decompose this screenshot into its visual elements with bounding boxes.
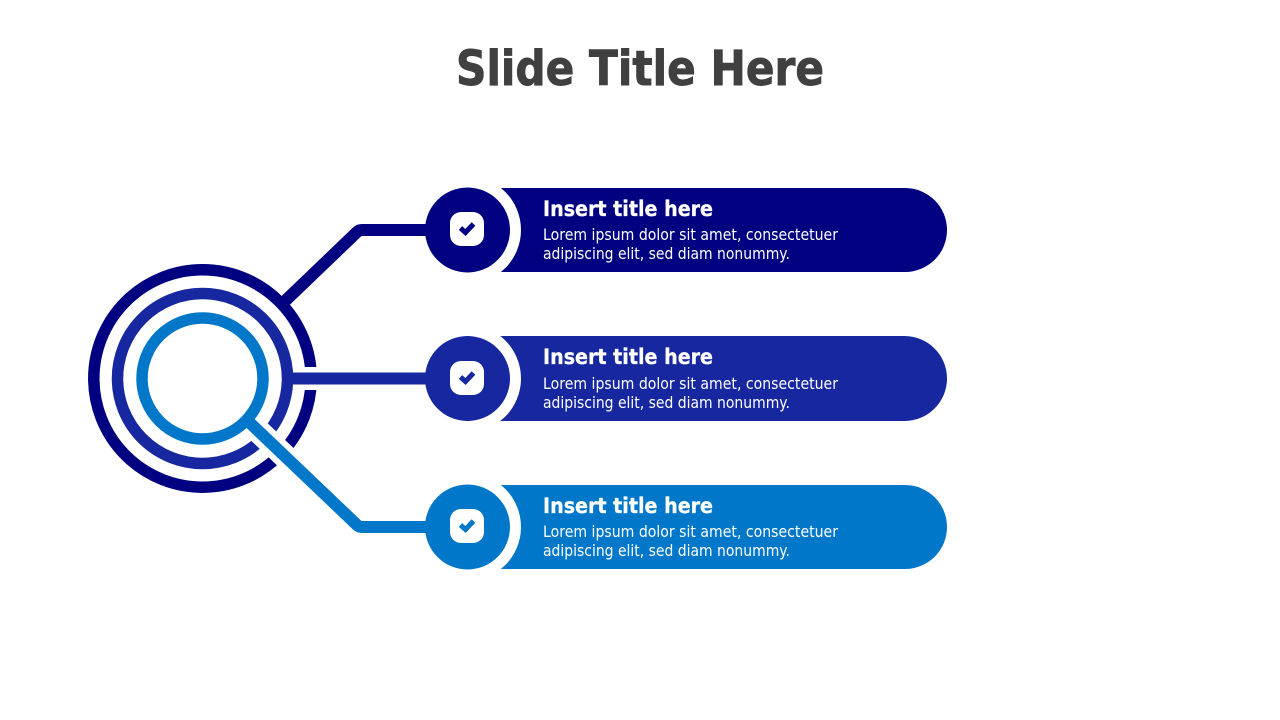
white halo	[413, 176, 521, 284]
gap for bottom connector	[250, 423, 295, 466]
item text	[543, 522, 838, 560]
title: Slide Title Here	[456, 41, 824, 97]
item text	[543, 225, 838, 263]
gap in outer ring for middle connector	[293, 367, 323, 390]
panel: item 1	[413, 176, 947, 284]
item text: adipiscing elit, sed diam nonummy.	[543, 393, 790, 412]
item text: Lorem ipsum dolor sit amet, consectetuer	[543, 225, 838, 244]
item text: Lorem ipsum dolor sit amet, consectetuer	[543, 522, 838, 541]
connector: bottom	[250, 422, 430, 527]
white halo	[413, 473, 521, 581]
icon: check badge	[425, 336, 510, 421]
item text: adipiscing elit, sed diam nonummy.	[543, 244, 790, 263]
outer ring	[94, 270, 311, 487]
panel: item 2	[413, 324, 947, 432]
item heading: Insert title here	[543, 345, 713, 369]
panel: item 3	[413, 473, 947, 581]
pill background	[480, 336, 947, 421]
item text: Lorem ipsum dolor sit amet, consectetuer	[543, 374, 838, 393]
inner ring	[142, 318, 263, 439]
middle ring	[118, 294, 288, 464]
connector: middle	[291, 372, 430, 384]
item heading: Insert title here	[543, 197, 713, 221]
icon: check badge	[425, 188, 510, 272]
item text	[543, 374, 838, 412]
connector: top	[283, 230, 430, 303]
icon: check badge	[425, 484, 510, 570]
diagram: concentric rings with connectors	[94, 230, 430, 527]
pill background	[480, 485, 947, 569]
white halo	[413, 324, 521, 432]
item heading: Insert title here	[543, 494, 713, 518]
pill background	[480, 188, 947, 272]
item text: adipiscing elit, sed diam nonummy.	[543, 541, 790, 560]
